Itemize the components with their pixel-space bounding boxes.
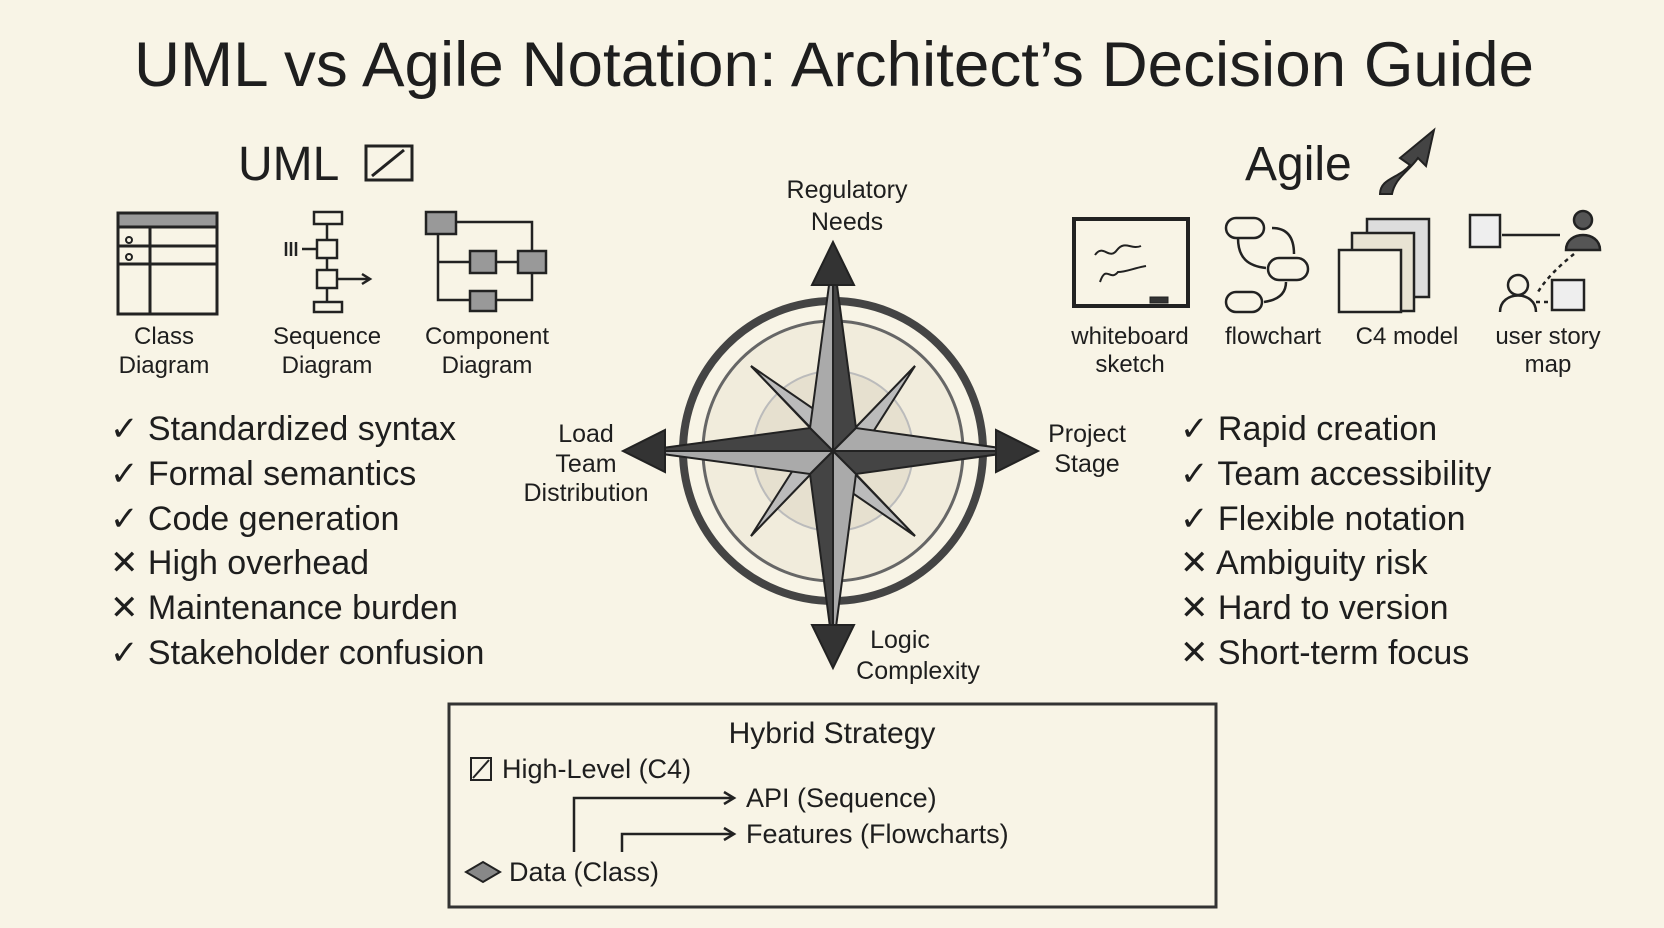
checklist: UML: ✓ Formal semantics xyxy=(110,455,416,493)
arrows xyxy=(574,792,734,852)
compass labels: Stage xyxy=(1054,450,1120,478)
checklist: UML: ✓ Standardized syntax xyxy=(110,410,456,448)
checklist: Agile: ✓ Team accessibility xyxy=(1180,455,1491,493)
icon labels: Component xyxy=(425,323,549,350)
compass labels: Load xyxy=(558,420,614,448)
heading: UML xyxy=(238,138,412,191)
icon: C4 model xyxy=(1339,219,1429,312)
checklist: Agile: ✕ Short-term focus xyxy=(1180,634,1469,672)
icon: sequence diagram xyxy=(286,212,370,312)
icon labels xyxy=(1070,323,1601,378)
icon: flowchart xyxy=(1226,218,1308,312)
icon labels: Class xyxy=(134,323,194,350)
checklist: Agile: ✓ Flexible notation xyxy=(1180,500,1466,538)
checklist: Agile xyxy=(1180,410,1491,672)
panel: hybrid strategy xyxy=(449,704,1216,907)
checklist: Agile: ✓ Rapid creation xyxy=(1180,410,1437,448)
panel: Agile xyxy=(1070,130,1601,672)
text: api: API (Sequence) xyxy=(746,783,937,813)
compass labels: Project xyxy=(1048,420,1126,448)
icon labels: whiteboard xyxy=(1070,323,1189,350)
compass labels: Regulatory xyxy=(787,176,908,204)
icon labels: flowchart xyxy=(1225,323,1321,350)
icon labels: Sequence xyxy=(273,323,381,350)
compass labels: Needs xyxy=(811,208,883,236)
compass xyxy=(623,242,1038,668)
icon labels: C4 model xyxy=(1356,323,1458,350)
icon labels: Diagram xyxy=(282,352,372,379)
compass labels: Distribution xyxy=(523,479,649,507)
text: high-level: High-Level (C4) xyxy=(502,754,691,784)
icon labels: Diagram xyxy=(442,352,532,379)
text: features: Features (Flowcharts) xyxy=(746,819,1009,849)
icon labels: sketch xyxy=(1095,351,1165,378)
checklist: Agile: ✕ Hard to version xyxy=(1180,589,1448,627)
icon labels xyxy=(119,323,549,379)
checklist: UML xyxy=(110,410,484,672)
heading: UML: UML xyxy=(238,138,339,191)
heading: Agile: Agile xyxy=(1245,138,1352,191)
icon: component diagram xyxy=(426,212,546,311)
checklist: UML: ✓ Code generation xyxy=(110,500,399,538)
compass labels: Team xyxy=(555,450,617,478)
heading: Agile xyxy=(1245,130,1434,194)
compass labels: Logic xyxy=(870,626,930,654)
icon: user story map xyxy=(1470,211,1600,312)
checklist: Agile: ✕ Ambiguity risk xyxy=(1180,544,1429,582)
compass labels xyxy=(523,176,1126,685)
icon: class diagram xyxy=(118,213,217,314)
panel: UML xyxy=(110,138,549,672)
heading: hybrid: Hybrid Strategy xyxy=(729,717,935,750)
checklist: UML: ✕ High overhead xyxy=(110,544,369,582)
icon labels: map xyxy=(1525,351,1571,378)
checklist: UML: ✕ Maintenance burden xyxy=(110,589,458,627)
icon labels: user story xyxy=(1495,323,1601,350)
text: data: Data (Class) xyxy=(509,857,659,887)
compass labels: Complexity xyxy=(856,657,980,685)
checklist: UML: ✓ Stakeholder confusion xyxy=(110,634,484,672)
title: UML vs Agile Notation: Architect’s Decision Guide xyxy=(134,30,1534,100)
icon: whiteboard xyxy=(1074,219,1188,306)
icon labels: Diagram xyxy=(119,352,209,379)
